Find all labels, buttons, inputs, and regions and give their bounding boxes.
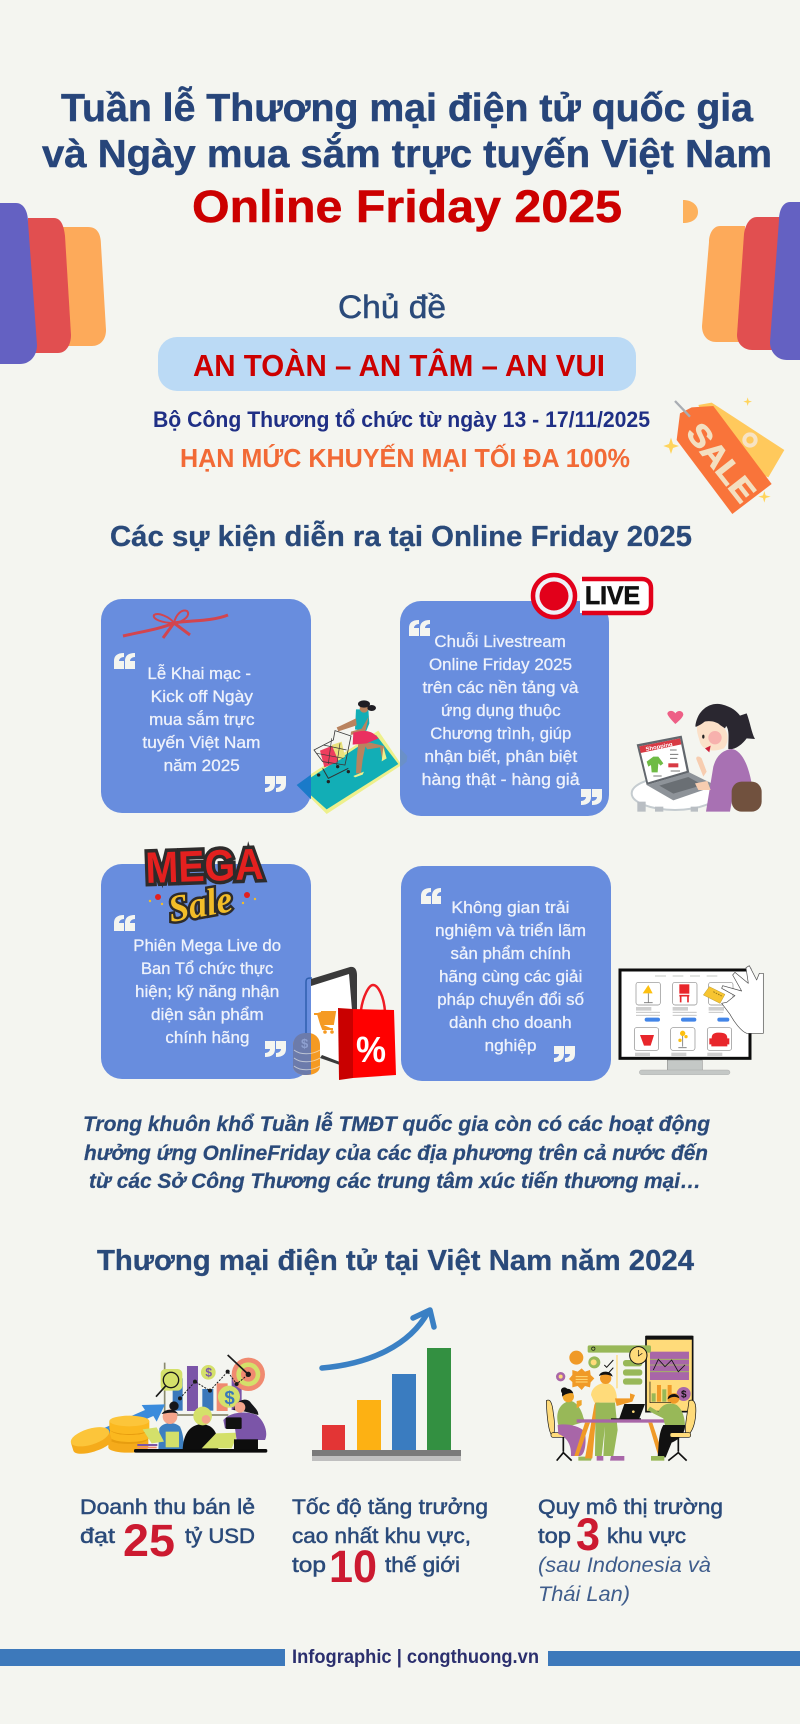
illustration: coins, charts and team: $ xyxy=(205,1366,212,1380)
stat: market size: top xyxy=(538,1525,571,1548)
illustration: woman running with shopping cart on phone xyxy=(297,700,407,814)
icon: sale tag xyxy=(663,397,784,514)
panel: mega live xyxy=(101,864,311,1079)
icon: mega sale logo: MEGA xyxy=(145,840,264,893)
stat: growth rate: thế giới xyxy=(385,1554,460,1577)
illustration: coins, charts and team: $ xyxy=(224,1387,235,1408)
card text: Chuỗi Livestream xyxy=(434,632,566,651)
stat: market size xyxy=(538,1496,723,1606)
card text: ứng dụng thuộc xyxy=(441,701,561,720)
title: Online Friday 2025 xyxy=(192,181,622,232)
theme pill: AN TOÀN – AN TÂM – AN VUI xyxy=(193,347,605,383)
stat: revenue: đạt xyxy=(80,1525,115,1548)
theme label: Chủ đề xyxy=(338,289,446,325)
heading: events: Các sự kiện diễn ra tại Online Friday 2025 xyxy=(110,519,692,553)
decoration: right colour stripes xyxy=(702,202,800,360)
bar chart: growth with arrow xyxy=(312,1310,461,1461)
stat: revenue xyxy=(80,1496,255,1566)
panel: livestream xyxy=(400,601,609,816)
stat: growth rate xyxy=(292,1496,488,1592)
stat: revenue: tỷ USD xyxy=(185,1525,255,1548)
panel: experience space xyxy=(401,866,611,1081)
illustration: market team meeting xyxy=(546,1336,696,1461)
icon: closing quote xyxy=(581,789,602,805)
icon: mega sale logo: Sale xyxy=(165,878,236,931)
icon: closing quote xyxy=(265,1041,286,1057)
card text: nhận biết, phân biệt xyxy=(424,747,577,766)
card text: nghiệm và triển lãm xyxy=(435,921,586,940)
card text: hàng thật - hàng giả xyxy=(422,770,580,789)
icon: mega sale logo xyxy=(145,840,264,931)
promotion limit line: HẠN MỨC KHUYẾN MẠI TỐI ĐA 100% xyxy=(180,443,630,473)
stat: growth rate: Tốc độ tăng trưởng xyxy=(292,1496,488,1519)
icon: opening quote xyxy=(421,888,441,904)
card text: Online Friday 2025 xyxy=(429,655,572,674)
stat: market size: Thái Lan) xyxy=(538,1583,630,1606)
stat: market size: (sau Indonesia và xyxy=(538,1554,711,1577)
card text: chính hãng xyxy=(165,1028,249,1047)
title: Tuần lễ Thương mại điện tử quốc gia xyxy=(61,86,753,130)
card text: dành cho doanh xyxy=(449,1013,572,1032)
stat: growth rate: top xyxy=(292,1554,326,1577)
decoration: small orange half dot xyxy=(683,200,698,223)
card text: Chương trình, giúp xyxy=(430,724,571,743)
theme pill xyxy=(158,337,636,391)
icon: sale tag: SALE xyxy=(679,417,762,509)
card text: nghiệp xyxy=(484,1036,536,1055)
card text: tuyến Việt Nam xyxy=(142,733,260,752)
illustration: phone, coins and shopping bag xyxy=(293,967,396,1080)
icon: live badge xyxy=(533,575,651,617)
card text: sản phẩm chính xyxy=(450,944,571,963)
icon: opening quote xyxy=(409,620,430,636)
text block: italic note: từ các Sở Công Thương các trung tâm xúc tiến thương mại… xyxy=(89,1170,701,1193)
illustration: phone, coins and shopping bag: % xyxy=(356,1029,386,1070)
footer xyxy=(0,1647,800,1668)
text block: italic note: Trong khuôn khổ Tuần lễ TMĐT quốc gia còn có các hoạt động xyxy=(83,1113,710,1136)
card text xyxy=(435,898,586,1055)
card text: hãng cùng các giải xyxy=(439,967,582,986)
illustration: coins, charts and team xyxy=(69,1355,267,1457)
card text xyxy=(422,632,580,789)
card text: trên các nền tảng và xyxy=(422,678,579,697)
card text: diện sản phẩm xyxy=(151,1005,264,1024)
stat: growth rate: cao nhất khu vực, xyxy=(292,1525,471,1548)
coin stack: $ xyxy=(301,1036,309,1051)
illustration: market team meeting: $ xyxy=(681,1390,687,1401)
decoration: left colour stripes xyxy=(0,203,106,364)
stat: growth rate: 10 xyxy=(329,1541,377,1592)
illustration: monitor with online store xyxy=(620,966,763,1075)
icon: closing quote xyxy=(554,1046,575,1062)
card text: mua sắm trực xyxy=(149,710,255,729)
stat: market size: 3 xyxy=(576,1509,600,1560)
card text xyxy=(142,664,260,775)
icon: live badge: LIVE xyxy=(585,582,640,610)
card text xyxy=(133,936,281,1047)
organiser line: Bộ Công Thương tổ chức từ ngày 13 - 17/11/2025 xyxy=(153,407,650,432)
icon: closing quote xyxy=(265,776,286,792)
illustration: woman shopping on laptop xyxy=(632,704,762,812)
stat: revenue: 25 xyxy=(123,1515,175,1566)
text block: italic note xyxy=(83,1113,710,1193)
card text: Lễ Khai mạc - xyxy=(148,664,251,683)
card text: hiện; kỹ năng nhận xyxy=(135,982,279,1001)
panel: opening ceremony xyxy=(101,599,311,813)
text block: italic note: hưởng ứng OnlineFriday của các địa phương trên cả nước đến xyxy=(84,1142,708,1165)
title xyxy=(42,86,772,232)
card text: Kick off Ngày xyxy=(151,687,254,706)
icon: ribbon xyxy=(123,611,228,638)
icon: opening quote xyxy=(114,915,135,931)
title: và Ngày mua sắm trực tuyến Việt Nam xyxy=(42,132,772,176)
stat: market size: khu vực xyxy=(607,1525,686,1548)
stat: market size: Quy mô thị trường xyxy=(538,1496,723,1519)
illustration: woman shopping on laptop: Shopping xyxy=(645,742,674,753)
runner xyxy=(337,700,387,777)
card text: Phiên Mega Live do xyxy=(133,936,281,955)
card text: năm 2025 xyxy=(164,756,240,775)
heading: e-commerce 2024: Thương mại điện tử tại Việt Nam năm 2024 xyxy=(97,1245,694,1277)
arrow xyxy=(322,1310,434,1368)
cart xyxy=(314,731,351,783)
card text: Ban Tổ chức thực xyxy=(141,959,274,978)
card text: pháp chuyển đổi số xyxy=(437,990,585,1009)
stat: revenue: Doanh thu bán lẻ xyxy=(80,1496,255,1519)
footer: Infographic | congthuong.vn xyxy=(292,1647,539,1668)
card text: Không gian trải xyxy=(451,898,569,917)
icon: opening quote xyxy=(114,653,135,669)
